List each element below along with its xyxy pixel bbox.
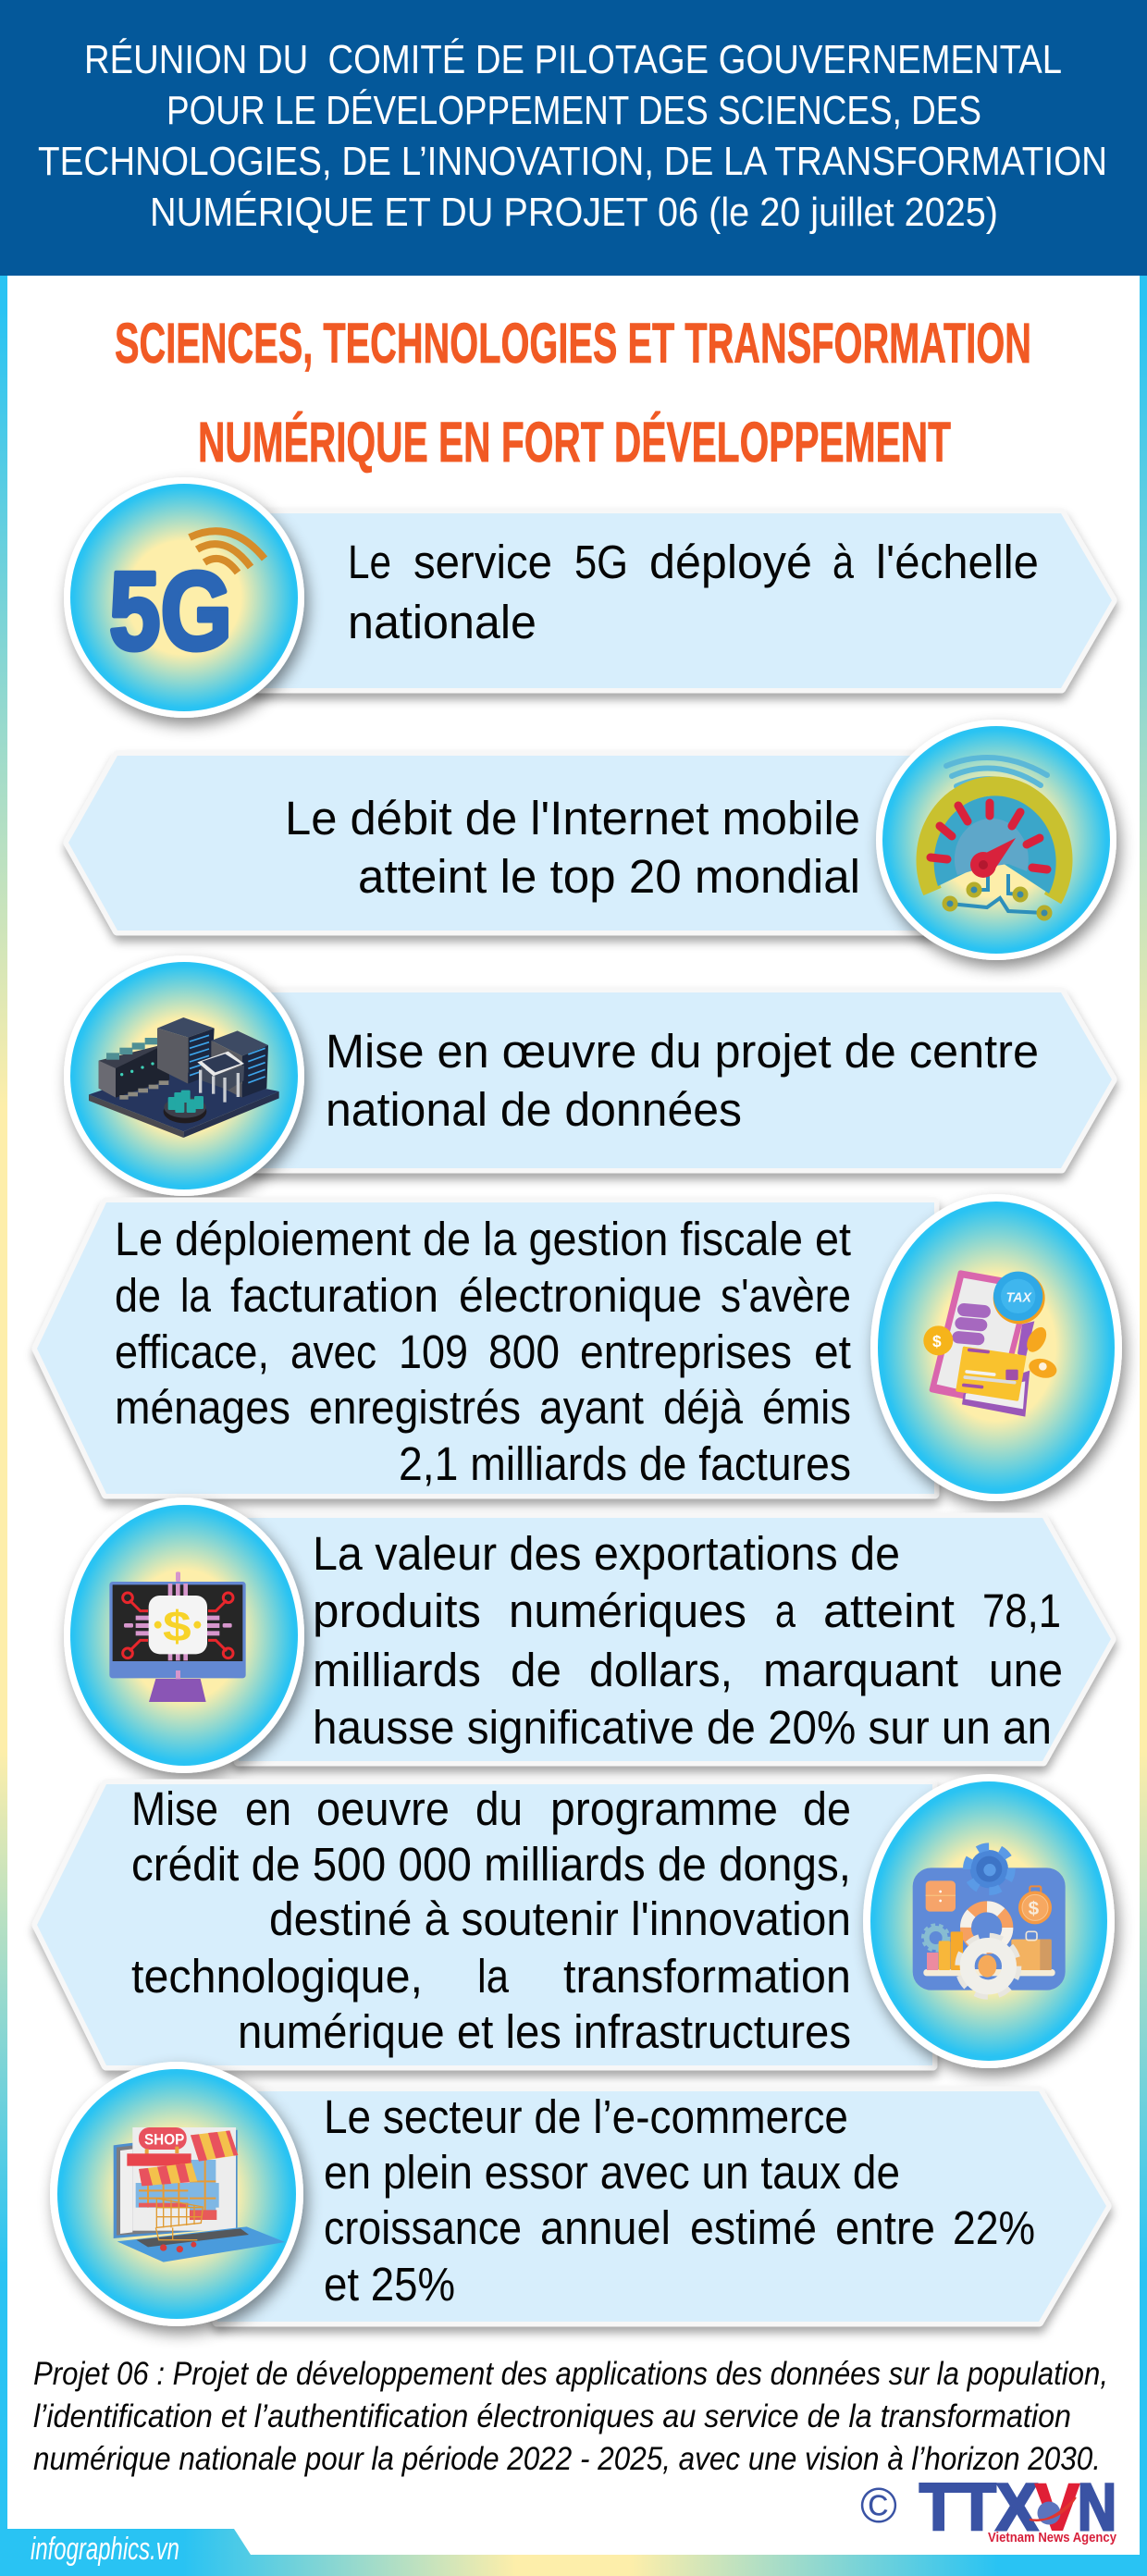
- text 4: 109: [399, 1325, 468, 1378]
- arrow banner 7: [217, 2091, 1106, 2322]
- text 6: la: [477, 1950, 510, 2003]
- text 6: technologique,: [131, 1950, 423, 2003]
- text 7: et 25%: [324, 2258, 455, 2311]
- text 1: service: [413, 536, 552, 588]
- text 6: de: [803, 1782, 851, 1835]
- text 5: numériques: [509, 1584, 746, 1637]
- bottom band with site tab: [0, 2529, 1147, 2576]
- panel: credit programme: [37, 1774, 1115, 2068]
- text 3: national de données: [326, 1083, 742, 1136]
- arrow banner 4: [37, 1202, 934, 1494]
- text 1: à: [832, 536, 855, 588]
- text 4: et: [814, 1325, 851, 1378]
- logo: TTXVN: TTX: [919, 2471, 1038, 2545]
- text 4: efficace,: [115, 1325, 269, 1378]
- text 4: entreprises: [580, 1325, 792, 1378]
- header title text: [38, 37, 1107, 235]
- text 5: hausse significative de 20% sur un an: [313, 1701, 1052, 1754]
- text 1: [348, 536, 1039, 648]
- text 5: dollars,: [589, 1644, 733, 1696]
- icon: 5G: 5G: [109, 549, 232, 673]
- site name: infographics.vn: [31, 2532, 179, 2567]
- arrow banner 6: [37, 1784, 932, 2065]
- text 4: de: [115, 1269, 161, 1322]
- text 5: une: [989, 1644, 1063, 1696]
- text 4: ayant: [539, 1381, 644, 1434]
- footnote: [33, 2356, 1108, 2477]
- logo: TTXVN: [919, 2471, 1117, 2545]
- text 7: entre: [835, 2201, 935, 2254]
- panel: e-commerce: [50, 2062, 1106, 2326]
- text 6: transformation: [563, 1950, 851, 2003]
- text 4: enregistrés: [309, 1381, 521, 1434]
- text 5: [313, 1527, 1063, 1754]
- text 4: ménages: [115, 1381, 290, 1434]
- text 4: 2,1 milliards de factures: [399, 1437, 851, 1490]
- text 3: Mise en œuvre du projet de centre: [326, 1025, 1039, 1078]
- panel: tax e-invoicing: [37, 1194, 1122, 1501]
- text 3: [326, 1025, 1039, 1136]
- text 6: Mise: [131, 1782, 218, 1835]
- text 6: en: [245, 1782, 291, 1835]
- header band: [0, 0, 1147, 276]
- header title text: NUMÉRIQUE ET DU PROJET 06 (le 20 juillet 2025): [150, 190, 998, 235]
- text 4: avec: [290, 1325, 376, 1378]
- text 4: Le déploiement de la gestion fiscale et: [115, 1213, 851, 1265]
- text 6: [131, 1782, 851, 2058]
- arrow banner 5: [239, 1518, 1111, 1761]
- text 5: La valeur des exportations de: [313, 1527, 900, 1580]
- text 5: milliards: [313, 1644, 481, 1696]
- text 5: 78,1: [982, 1584, 1061, 1637]
- text 1: Le: [348, 536, 391, 588]
- logo: TTXVN: V: [1035, 2471, 1079, 2545]
- text 7: 22%: [953, 2201, 1035, 2254]
- icon: tax phone: [870, 1194, 1122, 1501]
- icon: online shop laptop: [50, 2062, 303, 2326]
- icon: innovation board with gears: [863, 1774, 1115, 2068]
- text 7: en plein essor avec un taux de: [324, 2146, 900, 2199]
- text 5: de: [511, 1644, 561, 1696]
- logo: TTXVN: Vietnam News Agency: [988, 2530, 1117, 2545]
- icon: tax phone: TAX: [1006, 1290, 1032, 1305]
- text 4: déjà: [663, 1381, 744, 1434]
- icon: tax phone: $: [932, 1332, 942, 1350]
- logo: TTXVN: N: [1078, 2471, 1116, 2545]
- text 6: oeuvre: [316, 1782, 450, 1835]
- text 5: atteint: [823, 1584, 955, 1637]
- text 1: nationale: [348, 596, 536, 648]
- text 5: produits: [313, 1584, 481, 1637]
- text 2: [285, 792, 860, 903]
- text 2: atteint le top 20 mondial: [358, 850, 860, 903]
- main heading: [115, 312, 1031, 474]
- text 6: du: [475, 1782, 523, 1835]
- text 7: annuel: [540, 2201, 671, 2254]
- icon: online shop laptop: SHOP: [144, 2131, 184, 2149]
- text 6: destiné à soutenir l'innovation: [269, 1892, 851, 1945]
- arrow banner 3: [254, 992, 1112, 1168]
- icon: data centre: [64, 955, 304, 1196]
- text 1: déployé: [649, 536, 812, 588]
- text 1: l'échelle: [876, 536, 1039, 588]
- text 7: croissance: [324, 2201, 522, 2254]
- text 4: s'avère: [721, 1269, 851, 1322]
- text 2: Le débit de l'Internet mobile: [285, 792, 860, 844]
- header title text: POUR LE DÉVELOPPEMENT DES SCIENCES, DES: [166, 88, 981, 133]
- text 4: facturation: [230, 1269, 438, 1322]
- text 7: Le secteur de l’e-commerce: [324, 2090, 848, 2143]
- text 6: programme: [550, 1782, 778, 1835]
- arrow banner 1: [254, 513, 1112, 688]
- icon: speedometer: [876, 720, 1116, 960]
- arrow banner 2: [68, 756, 930, 931]
- icon: digital export monitor: $: [163, 1602, 191, 1650]
- text 7: [324, 2090, 1035, 2311]
- panel: digital product exports: [64, 1498, 1111, 1773]
- panel: national data centre: [64, 955, 1112, 1196]
- footnote: l’identification et l’authentification électroniques au service de la transformation: [33, 2398, 1071, 2434]
- text 7: estimé: [690, 2201, 817, 2254]
- icon: digital export monitor: [64, 1498, 304, 1773]
- text 4: la: [180, 1269, 212, 1322]
- text 4: électronique: [459, 1269, 702, 1322]
- text 1: 5G: [574, 536, 628, 588]
- panel: mobile internet speed: [68, 720, 1116, 960]
- text 4: [115, 1213, 851, 1490]
- text 4: 800: [488, 1325, 560, 1378]
- copyright symbol: ©: [860, 2478, 897, 2533]
- icon: innovation board with gears: $: [1029, 1898, 1040, 1919]
- text 5: a: [775, 1584, 796, 1637]
- text 6: numérique et les infrastructures: [238, 2005, 851, 2058]
- text 4: émis: [762, 1381, 851, 1434]
- panel: 5G service: [64, 477, 1112, 718]
- text 6: crédit de 500 000 milliards de dongs,: [131, 1838, 851, 1891]
- text 5: marquant: [763, 1644, 958, 1696]
- icon: 5G: [64, 477, 304, 718]
